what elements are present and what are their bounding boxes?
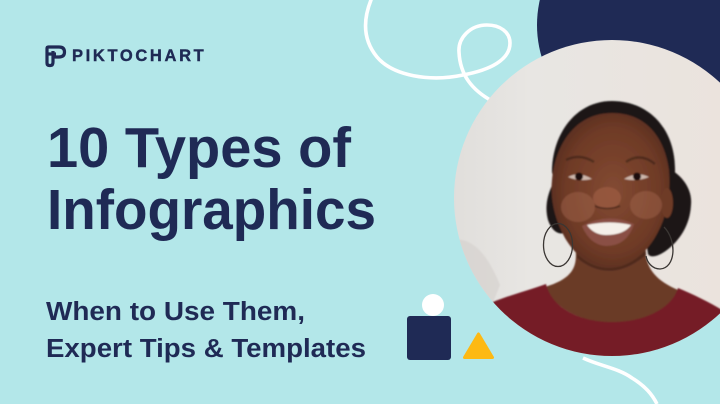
- icon: Piktochart mark: [47, 47, 64, 66]
- cheek highlights: [561, 192, 595, 222]
- title: 10 Types of: [47, 116, 352, 180]
- hair bun: [646, 172, 692, 258]
- photo: smiling woman in circular frame: [450, 36, 720, 370]
- eyes: [568, 172, 649, 180]
- wall shadow: [460, 240, 500, 302]
- decorative navy circle: [537, 0, 720, 138]
- title: Infographics: [47, 178, 376, 242]
- earrings: [544, 224, 673, 269]
- decorative white loop line: [366, 0, 510, 101]
- icon: navy square: [407, 316, 451, 360]
- logo: [47, 47, 206, 66]
- hair and headband: [550, 100, 676, 175]
- face: [552, 113, 670, 268]
- title: [47, 116, 376, 242]
- subtitle: When to Use Them,: [46, 298, 305, 326]
- subtitle: [46, 298, 366, 363]
- icon: white circle: [422, 294, 444, 316]
- neck: [545, 245, 678, 323]
- nose: [593, 187, 621, 209]
- logo wordmark: PIKTOCHART: [72, 47, 206, 65]
- decorative white bottom curve: [583, 358, 657, 404]
- sweater: [492, 283, 720, 356]
- photo background wall: [450, 36, 720, 362]
- subtitle: Expert Tips & Templates: [46, 335, 366, 363]
- icon: yellow triangle: [464, 334, 492, 358]
- ear: [664, 188, 674, 219]
- eyebrows: [566, 157, 655, 164]
- mouth: [582, 218, 634, 246]
